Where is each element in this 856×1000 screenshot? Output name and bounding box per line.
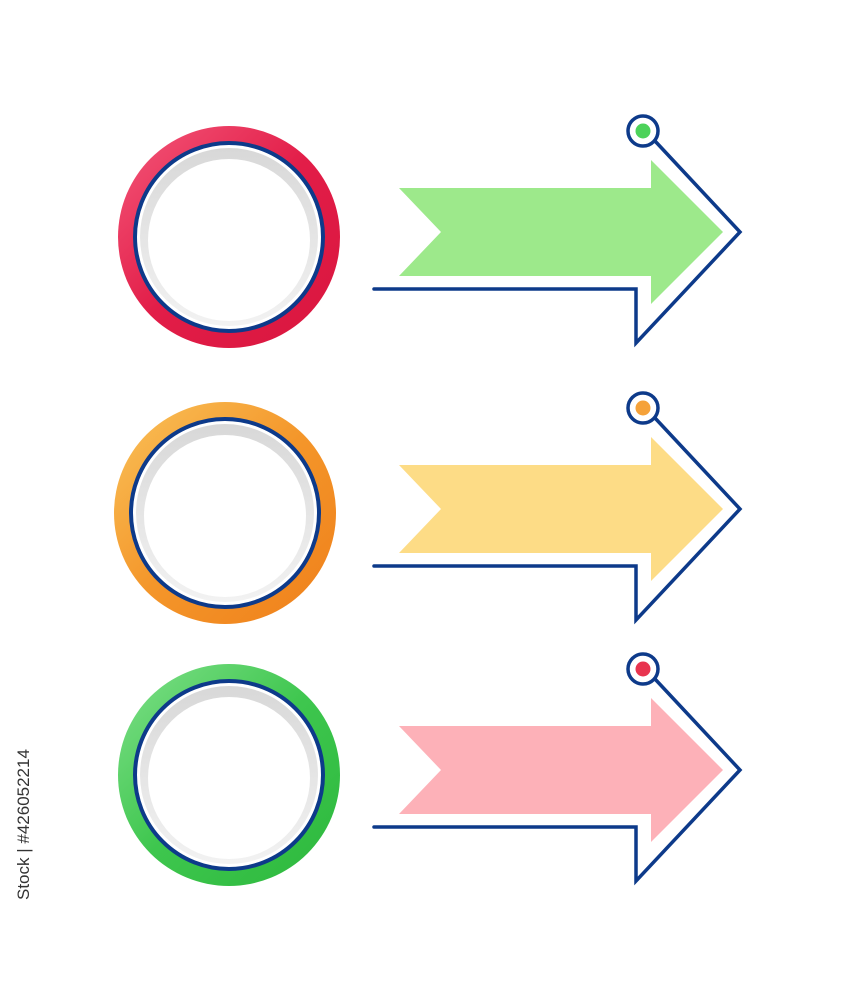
circle 1: red (118, 126, 340, 348)
circle 2: orange (114, 402, 336, 624)
stock id text: Stock | #426052214 (14, 749, 33, 900)
arrow 2: yellow (374, 393, 740, 620)
arrow 3: pink (374, 654, 740, 881)
circle 3: green (118, 664, 340, 886)
arrow 1: green (374, 116, 740, 343)
